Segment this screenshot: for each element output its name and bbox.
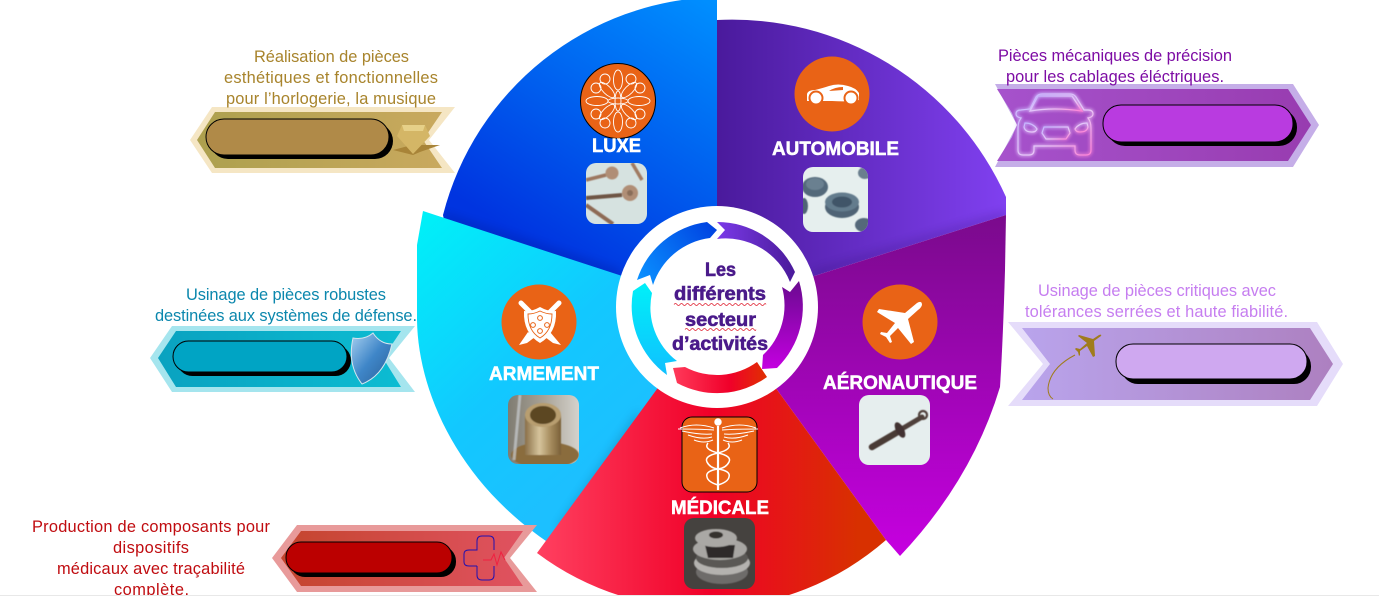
text: luxe description: Réalisation de pièces (254, 48, 409, 66)
text: aéronautique description: tolérances serrées et haute fiabilité. (1025, 303, 1288, 321)
heading: aéronautique: AÉRONAUTIQUE (823, 372, 977, 394)
centre title: d’activités (672, 334, 768, 355)
text: automobile description: Pièces mécaniques de précision (998, 47, 1232, 65)
panel: médicale wedge (537, 307, 886, 596)
text: aéronautique description: Usinage de pièces critiques avec (1038, 282, 1276, 300)
icon: caduceus (678, 417, 758, 492)
central circular diagram (616, 206, 818, 408)
text: armement description: destinées aux systèmes de défense. (155, 307, 417, 325)
centre title: secteur (685, 310, 757, 331)
panel: aéronautique banner (1008, 322, 1343, 406)
arrow: armement (632, 283, 677, 375)
text: luxe description (224, 48, 438, 108)
panel: médicale banner (272, 525, 537, 592)
text: luxe description: pour l’horlogerie, la musique (226, 90, 436, 108)
centre title (672, 260, 768, 355)
arrow: luxe (637, 222, 717, 285)
photo: armement bronze part (508, 395, 579, 468)
icon: blue shield (351, 333, 392, 384)
photo: luxe keys (586, 163, 647, 224)
centre title: Les (705, 260, 736, 281)
text: automobile description (998, 47, 1232, 86)
icon: plane with trail (1048, 335, 1101, 399)
panel: armement banner (150, 326, 415, 392)
text: médicale description (32, 518, 271, 596)
icon: gold diamond (393, 125, 440, 155)
armement pill (173, 341, 351, 376)
text: armement description: Usinage de pièces robustes (186, 286, 386, 304)
heading: luxe: LUXE (592, 136, 641, 157)
icon: airplane (862, 284, 938, 360)
photo: automobile parts (803, 167, 868, 232)
aéronautique pill (1116, 344, 1311, 384)
icon: luxe ornament (580, 64, 656, 138)
heading: armement: ARMEMENT (489, 364, 599, 385)
icon: medical cross with pulse (464, 536, 505, 580)
text: automobile description: pour les cablages éléctriques. (1006, 68, 1224, 86)
panel: automobile banner (995, 84, 1319, 167)
arrow: automobile (717, 222, 795, 282)
automobile pill (1103, 105, 1297, 146)
photo: aéronautique part (859, 395, 930, 465)
text: luxe description: esthétiques et fonctionnelles (224, 69, 438, 87)
médicale pill (286, 542, 456, 577)
panel: luxe wedge (443, 0, 717, 307)
icon: sports car (794, 56, 870, 132)
icon: neon car (1016, 94, 1093, 155)
centre title: différents (674, 284, 766, 305)
photo: médicale coupling (684, 518, 755, 589)
text: médicale description: dispositifs (113, 539, 189, 557)
arrow: médicale (673, 362, 767, 393)
heading: médicale: MÉDICALE (671, 497, 769, 519)
text: aéronautique description (1025, 282, 1288, 321)
text: médicale description: Production de composants pour (32, 518, 271, 536)
heading: automobile: AUTOMOBILE (772, 139, 899, 160)
icon: shield and swords (502, 284, 576, 360)
text: armement description (155, 286, 417, 325)
panel: luxe banner (190, 107, 455, 173)
arrow: aéronautique (762, 281, 803, 369)
panel: armement wedge (417, 211, 717, 550)
text: médicale description: médicaux avec traçabilité (57, 560, 245, 578)
panel: aéronautique wedge (717, 215, 1006, 556)
luxe pill (206, 119, 393, 159)
panel: automobile wedge (717, 20, 1006, 307)
